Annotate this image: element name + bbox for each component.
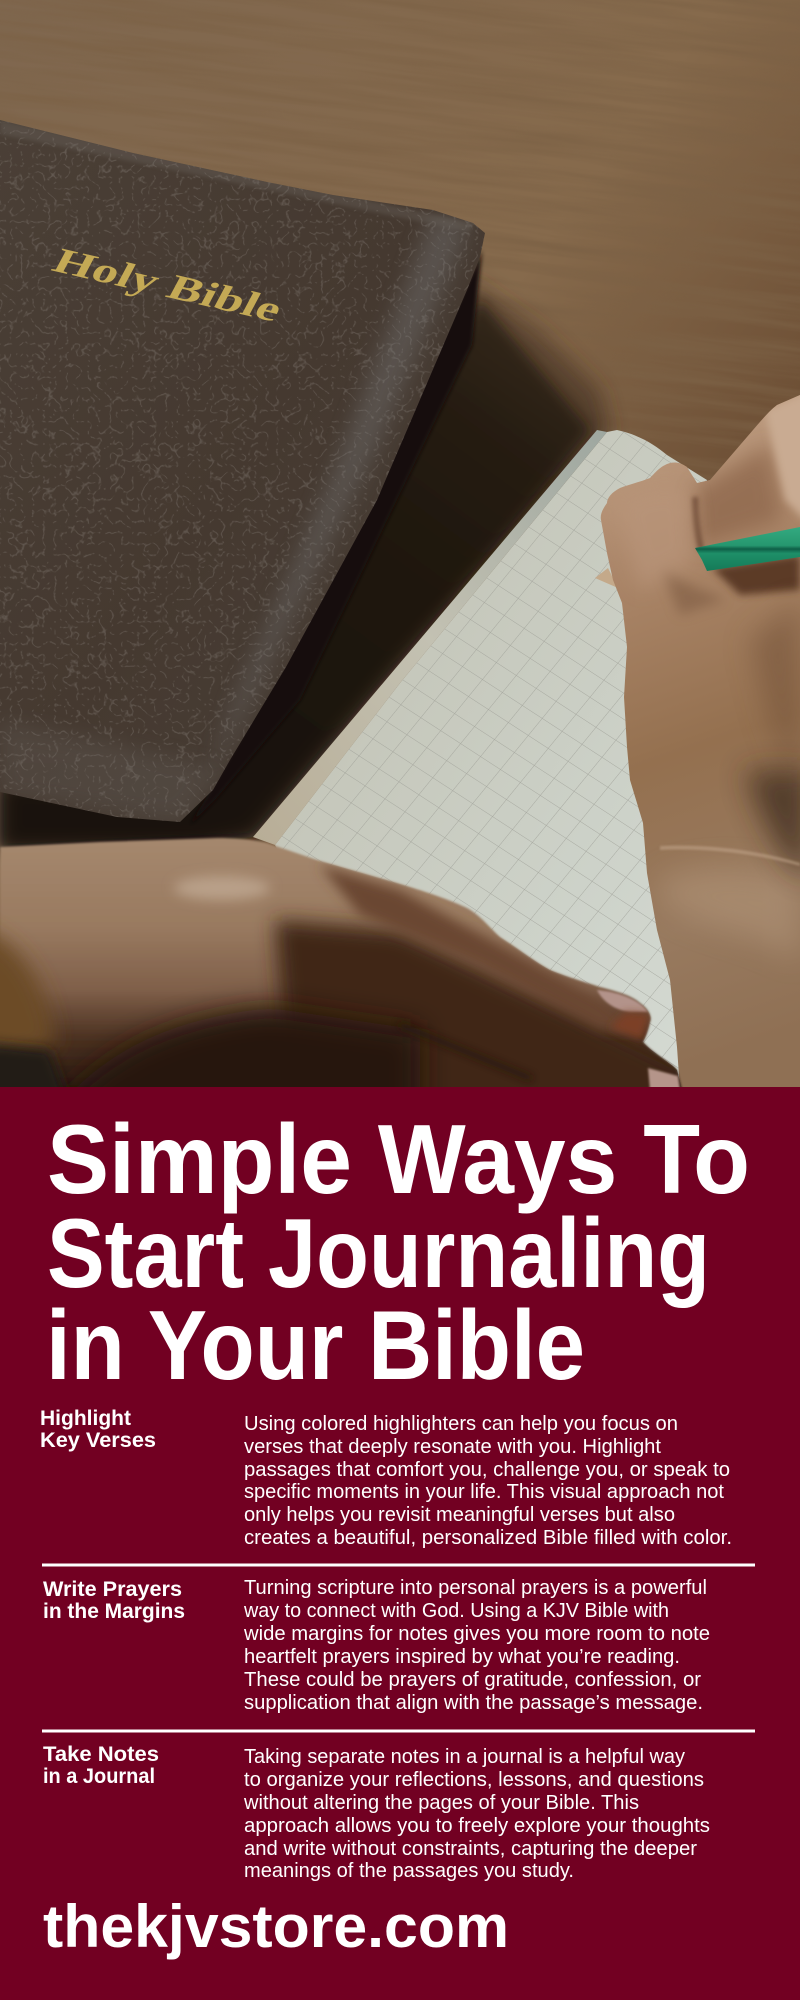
title: Start Journaling [47, 1198, 710, 1308]
dark fill beside notebook edge [0, 300, 590, 850]
section 3 heading: Take Notes [43, 1743, 159, 1766]
section 1 body text: specific moments in your life. This visual approach not [244, 1481, 724, 1503]
hero photo: Bible and journal on a wooden table [0, 0, 800, 1130]
section 3 body text: Taking separate notes in a journal is a helpful way [244, 1746, 685, 1768]
section 3 body text: and write without constraints, capturing the deeper [244, 1838, 697, 1860]
cover title: Holy Bible [46, 240, 290, 329]
section 3: take notes in a journal [43, 1743, 710, 1882]
title [46, 1104, 750, 1400]
section 2 body text: way to connect with God. Using a KJV Bible with [243, 1600, 669, 1622]
section 3 body text: approach allows you to freely explore your thoughts [244, 1815, 710, 1837]
section 3 body text: meanings of the passages you study. [244, 1860, 574, 1882]
section 1 heading [40, 1407, 156, 1452]
section 2 heading: Write Prayers [43, 1578, 182, 1601]
section 2 body text: wide margins for notes gives you more room to note [243, 1623, 710, 1645]
section 2 heading: in the Margins [43, 1600, 185, 1623]
Bible page block and ribbon [190, 250, 482, 825]
resting hand [0, 836, 683, 1087]
section 1 heading: Key Verses [40, 1429, 156, 1452]
section 1 body text [244, 1413, 732, 1549]
section 3 heading: in a Journal [43, 1765, 155, 1788]
writing hand [601, 390, 800, 1090]
section 2 heading [43, 1578, 185, 1623]
section 1: highlight key verses [40, 1407, 732, 1549]
pencil [695, 527, 800, 571]
section 2 body text: heartfelt prayers inspired by what you’re reading. [244, 1646, 680, 1668]
section 1 body text: verses that deeply resonate with you. Highlight [244, 1436, 661, 1458]
pencil tip [595, 568, 616, 587]
section 3 body text [243, 1746, 710, 1882]
section 2 body text: These could be prayers of gratitude, confession, or [244, 1669, 701, 1691]
section 1 body text: Using colored highlighters can help you focus on [244, 1413, 678, 1435]
title: in Your Bible [46, 1290, 585, 1400]
section 1 body text: passages that comfort you, challenge you, or speak to [244, 1459, 730, 1481]
section 1 heading: Highlight [40, 1407, 131, 1430]
section 2: write prayers in the margins [43, 1577, 710, 1714]
wooden table [0, 0, 800, 950]
open notebook [240, 420, 720, 1090]
section 2 body text: Turning scripture into personal prayers is a powerful [244, 1577, 707, 1599]
title: Simple Ways To [47, 1104, 750, 1214]
section 1 body text: creates a beautiful, personalized Bible filled with color. [244, 1527, 732, 1549]
section 2 body text: supplication that align with the passage’s message. [244, 1692, 703, 1714]
Bible cover [0, 110, 490, 830]
dark gap under the Bible [0, 280, 610, 850]
section 3 heading [43, 1743, 159, 1788]
section 3 body text: without altering the pages of your Bible. This [243, 1792, 639, 1814]
section 2 body text [243, 1577, 710, 1714]
wood grain [526, 137, 800, 478]
website footer: thekjvstore.com [43, 1893, 509, 1960]
section 1 body text: only helps you revisit meaningful verses but also [244, 1504, 675, 1526]
section 3 body text: to organize your reflections, lessons, and questions [244, 1769, 704, 1791]
